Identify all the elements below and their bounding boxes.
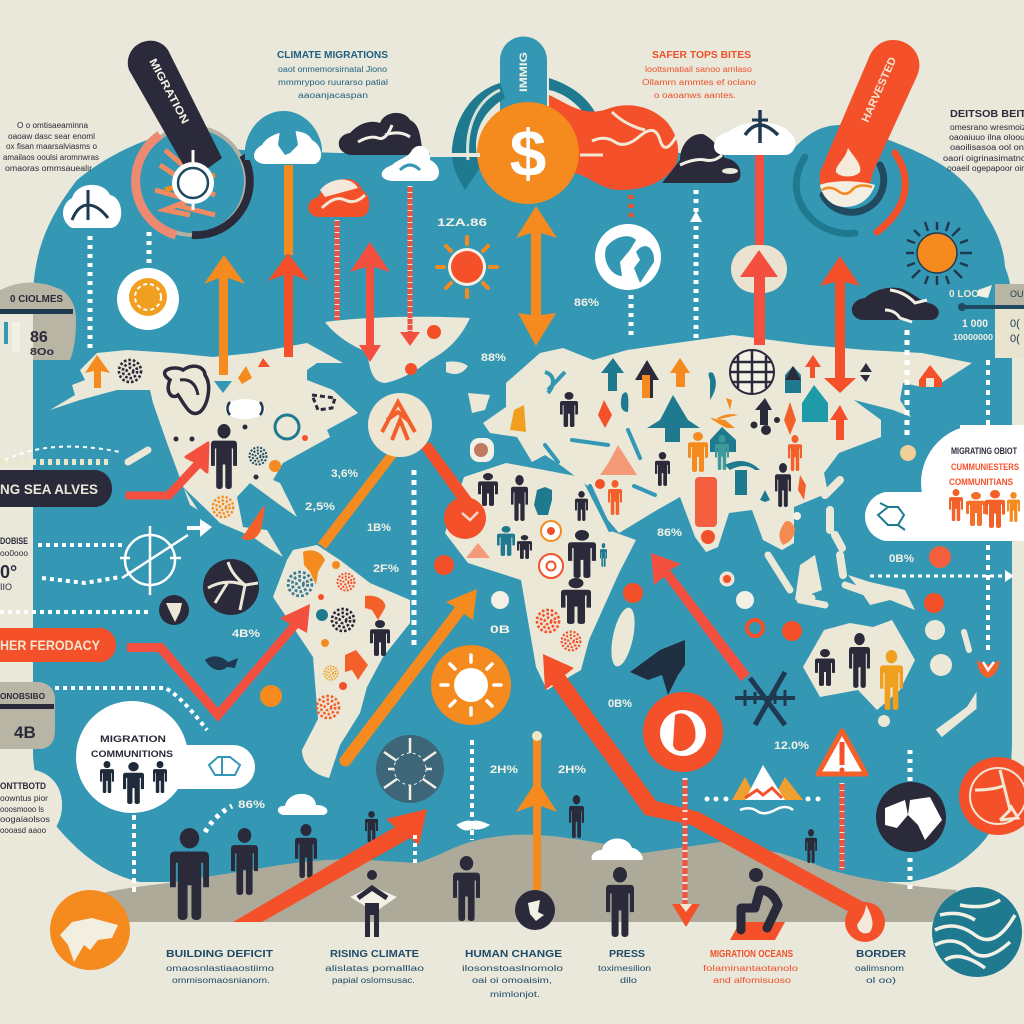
dark pill migration: MIGRATION [146,57,191,126]
pill: higher frequency [0,628,116,662]
bottom caption 5: and alfomisuoso [713,976,792,985]
red double arrow [350,242,390,362]
red shield marker [977,660,1000,678]
map: South America [273,545,410,778]
bottom caption 2 [325,949,425,985]
dollar coin: $ [510,116,546,190]
right side gauge panel: 0( [1010,333,1020,345]
right side gauge panel: 0( [1010,318,1020,330]
dashed lines right [870,360,1005,655]
dashed red line 2 with head [400,186,420,346]
cloud icon top left with plane [63,185,121,228]
dashed lines left [0,447,207,730]
kneeling person [730,868,785,940]
dashed lines center [631,190,696,340]
heading: climate migrations: oaot onmemorsirnatal Jiono [278,65,388,74]
map: Africa [445,463,636,690]
red rising arrow [233,809,427,922]
map: Greenland [325,317,470,383]
top right text block: oaori oigrinasimatno [943,154,1024,163]
left side gauge panel: 8Oo [30,347,54,358]
percent labels: 86% [238,799,265,811]
bottom caption 4: dilo [620,976,638,985]
bottom caption 5: folaminantaotanolo [703,964,799,973]
mountain icon [732,765,803,813]
red shaft and circled arrow [731,155,787,345]
dark pill migration [128,41,222,180]
left side text rows: IIO [0,582,12,592]
left side gauge panel: 86 [30,329,48,346]
percent labels: 3,6% [331,468,358,480]
bottom caption 2: papial oslomsusac. [332,976,415,985]
heading: climate migrations: mmmrypoo ruurarso patial [278,78,388,87]
orange storm cloud [308,179,369,217]
heading: sea impacts: Ollamrn ammtes ef oclano [642,78,757,87]
left side gauge panel: 0 CIOLMES [10,294,63,305]
bottom caption 6: ol oo) [866,976,896,985]
wave globe [932,887,1022,977]
dashed line and mustache [458,740,488,840]
lower left text: oooasd aaoo [0,826,47,835]
orange arrow to africa [339,589,477,767]
white side arrow [187,519,212,537]
right side gauge panel: OU [1010,289,1024,299]
right side gauge panel: 1 000 [962,318,988,330]
percent labels: 2H% [490,764,518,776]
red dots near Greenland [405,325,441,375]
lower left text: ooosmooo ls [0,805,44,814]
bottom caption 1 [166,949,275,985]
dashes near arrow [413,835,417,865]
globe cloud dome [245,111,322,164]
small dark globe [159,595,189,625]
globe network icon dashes [904,330,910,440]
sun icon dark rays [906,222,972,285]
chevron badge [368,393,432,457]
heading: sea impacts [642,50,757,100]
map: North America [50,343,358,557]
percent labels: 86% [574,297,599,309]
dashed connector left [88,236,92,350]
orange double arrow center [516,206,557,346]
bottom caption 6 [855,949,907,985]
top right text block: ooaeil ogepapoor oin [947,164,1024,173]
left side text rows: oo0ooo [0,549,29,558]
ring gauge top left [136,125,250,237]
bottom caption 6: BORDER [856,949,907,960]
red blob with waves [549,95,678,190]
red thermometer pill [820,40,919,207]
orange line to chevron badge [318,447,400,549]
percent labels: 1ZA.86 [437,217,487,229]
dashed red line under warning [840,783,844,870]
dashed arc to people [205,806,232,832]
percent labels: 2H% [558,764,586,776]
white cloud with plane [714,110,795,155]
white cloud with bird [382,146,439,181]
tan dot [900,445,916,461]
dashed red line down [672,778,700,927]
left gauge panel lower [0,682,55,749]
top left text block: ox fisan maarsalviasms o [6,142,98,151]
crossed tools icon [735,672,795,725]
percent labels: 0B% [608,698,632,710]
connector cloud to dollar [430,153,480,157]
red globe badge [643,692,723,772]
right side gauge panel [949,284,1024,358]
red dot west atlantic [434,555,454,575]
dashed vertical center [412,470,416,650]
red line to africa pin [420,442,478,517]
heading: sea impacts: loottsmatiail sanoo amlaso [645,65,753,74]
africa people [466,473,607,650]
dashed connector to brain badge [146,232,152,270]
bottom caption 2: alislatas pomalllao [325,964,425,973]
red arrow to south asia [651,553,750,681]
white triangle marker [690,211,702,222]
left side text rows: 0° [0,562,17,582]
callout bubble: rising communities [865,425,1024,541]
pill: higher frequency: HER FERODACY [0,637,101,653]
person with cape [350,870,397,937]
lower left text [0,781,50,835]
small white cloud [278,794,327,815]
connector below bubble [132,815,136,892]
top left text block: oaoaw dasc sear enoml [8,132,95,141]
bottom caption 4: PRESS [609,949,645,960]
percent labels: 86% [657,527,682,539]
left text blob [0,770,62,842]
orange sun badge [431,645,511,725]
dark world globe [876,782,946,852]
bottom caption 2: RISING CLIMATE [330,949,419,960]
map: Eurasia [483,335,972,552]
top right text block: omesrano wresmoiz [950,123,1024,132]
orange dot [260,685,282,707]
lower left text: ONTTBOTD [0,781,46,791]
orange wedge [243,507,264,539]
target dial [172,150,214,210]
europe and asia icons [510,350,942,545]
callout bubble: migration communities: COMMUNITIONS [91,749,173,759]
percent labels: 0B [490,624,510,636]
bottom caption 3: HUMAN CHANGE [465,949,562,960]
teal pill with dollar gauge arcs [435,36,595,190]
bottom caption 1: ommisomaosnianom. [172,976,270,985]
bottom caption 3: oai oi omoaisim, [472,976,552,985]
percent labels: 2F% [373,563,399,575]
right side gauge panel: 10000000 [953,333,994,342]
orange red arrow 2 [268,165,309,357]
callout bubble: rising communities: COMMUNITIANS [949,477,1013,487]
top left text block: amailaos ooulsi aromnwras [3,153,99,162]
lower left text: oogaiaolsos [0,815,50,824]
right ring arcs [796,153,905,234]
africa pin red [444,497,486,539]
bottom caption 6: oalimsnom [855,964,904,973]
percent labels: 2,5% [305,501,335,513]
red line long arrow to south africa [543,654,867,919]
red long arrow right [820,256,860,393]
bottom caption 5 [703,949,799,985]
australia people [815,633,903,710]
bottom caption 3: ilosonstoaslnomolo [462,964,564,973]
heading: climate migrations: CLIMATE MIGRATIONS [277,50,388,61]
dollar coin [477,102,579,204]
heading: climate migrations: aaoanjacaspan [298,91,368,100]
dark teal virus badge [376,735,444,803]
orange up arrow 1 [204,255,245,375]
bottom caption 4 [598,949,651,985]
page bottom band [0,922,1024,1024]
left side text rows: DOBISE [0,536,28,546]
right side gauge panel: 0 LOO [949,289,979,300]
dashed red line 1 [334,220,340,320]
heading: sea impacts: o oaoanws aantes. [654,91,736,100]
left gauge panel lower: 4B [14,723,36,742]
dashes around dark globe [908,750,912,890]
europe small badge [470,438,494,462]
top right text block: oaoaiuuo ilna oloou [949,133,1024,142]
south america icons [288,550,390,718]
top left text block [3,121,99,173]
callout bubble: migration communities: MIGRATION [100,734,166,744]
teal pill with dollar gauge arcs: IMMIG [518,52,530,92]
red globe right [959,757,1024,835]
small white cloud at hill [592,838,643,860]
teal small arrowhead on north america [214,381,232,393]
left gauge panel lower: ONOBSIBO [0,691,45,701]
dark mini globe bottom [515,890,555,930]
bottom caption 1: omaosnlastiaaostiimo [166,964,275,973]
callout bubble: migration communities [76,701,255,813]
brain badge [117,268,179,330]
bottom caption 5: MIGRATION OCEANS [710,949,793,960]
top right text block: DEITSOB BEIT [950,109,1024,120]
top right text block [943,109,1024,173]
pill: rising sea: NG SEA ALVES [0,481,98,497]
bottom caption 1: BUILDING DEFICIT [166,949,273,960]
sun icon orange [437,237,497,297]
ground hill [88,835,957,922]
lower left text: oowntus pior [0,794,48,803]
percent labels [232,217,914,811]
percent labels: 12.0% [774,740,809,752]
sea dots and markers [491,546,969,727]
percent labels: 0B% [889,553,914,565]
whale tail icon [630,640,685,695]
bottom caption 3 [462,949,564,999]
dark crack circle [203,559,259,615]
dark storm cloud [339,113,423,155]
dark cloud right [852,288,939,322]
orange world badge bottom left [50,890,130,970]
bottom caption 4: toximesilion [598,964,651,973]
warning triangle [818,731,866,774]
orange vertical arrow bottom [516,731,557,890]
crosshair icon [120,526,188,595]
red thermometer pill: HARVESTED [860,55,899,124]
top left text block: omaoras ommsauealir [5,164,92,173]
percent labels: 4B% [232,628,260,640]
top left text block: O o omtisaeaminna [17,121,89,130]
fish icon [205,656,238,670]
small arrow tip right [1005,570,1014,582]
red line arrow: sea [127,443,208,498]
top right text block: oaoilisasoa ool oni [950,143,1024,152]
dark cloud center right [662,134,740,183]
left side text rows [0,536,29,592]
globe badge [595,224,661,290]
bottom caption 3: mimlonjot. [490,990,540,999]
red zigzag arrow [127,604,310,722]
percent labels: 88% [481,352,506,364]
heading: climate migrations [277,50,388,100]
percent labels: 1B% [367,522,391,534]
map: Australia [803,620,915,710]
ocean map panel [33,125,1012,882]
pill: rising sea [0,470,112,507]
mountain dotted line [704,796,820,802]
red flame badge [845,902,885,942]
map: islands and inland seas [128,362,975,735]
north america icons [85,355,335,517]
people on hill [170,795,817,937]
left side gauge panel [0,282,76,360]
heading: sea impacts: SAFER TOPS BITES [652,50,751,61]
